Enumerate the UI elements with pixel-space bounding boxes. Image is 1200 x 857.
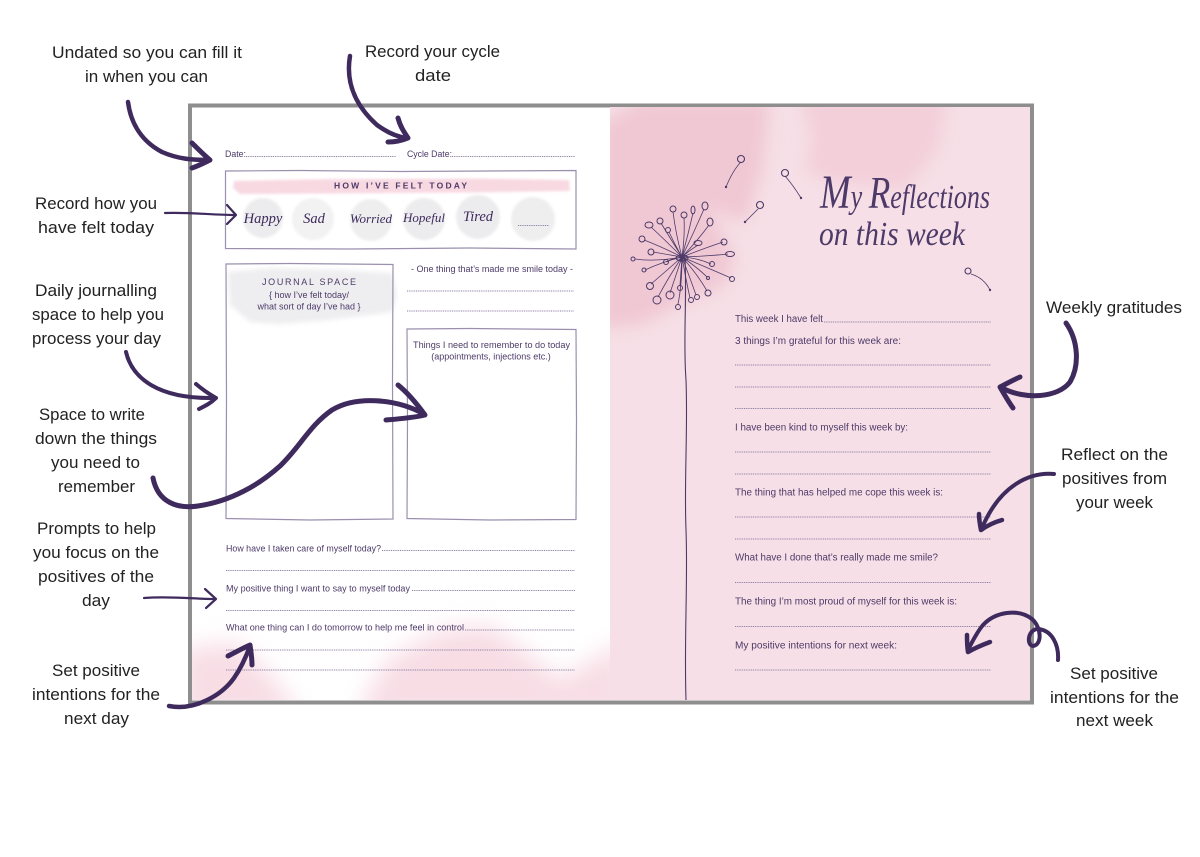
panel: journal space: what sort of day I’ve had }: [256, 302, 361, 312]
callout: next day intentions: next day: [64, 710, 130, 728]
callout: daily journalling: space to help you: [32, 306, 164, 324]
dandelion illustration: [631, 202, 734, 700]
arrow: to cycle date: [349, 56, 408, 142]
panel: left daily journal page: [180, 149, 625, 720]
panel: things to remember: (appointments, injections etc.): [431, 352, 551, 362]
panel: journal space: { how I’ve felt today/: [269, 290, 350, 300]
callout: undated: [52, 44, 242, 86]
floating seeds: [725, 156, 991, 291]
weekly prompts: The thing that has helped me cope this week is:: [735, 488, 943, 498]
smile prompt: - One thing that’s made me smile today -: [411, 264, 573, 274]
panel: how I've felt today: Sad: [303, 211, 326, 227]
title: My Reflections on this week: [819, 166, 990, 253]
weekly prompts: The thing I’m most proud of myself for this week is:: [735, 596, 957, 608]
callout: undated: Undated so you can fill it: [52, 44, 242, 62]
arrow: to feelings panel: [165, 205, 236, 224]
callout: weekly positives: your week: [1076, 494, 1154, 512]
weekly prompts: My positive intentions for next week:: [735, 640, 897, 652]
arrow: to gratitudes: [1000, 323, 1076, 408]
callout: how you have felt: [35, 195, 157, 237]
callout: things to remember: Space to write: [39, 406, 145, 424]
weekly prompts: I have been kind to myself this week by:: [735, 422, 908, 434]
daily prompts: How have I taken care of myself today?: [226, 544, 381, 554]
panel: things to remember: Things I need to remember to do today: [413, 340, 570, 350]
callout: next day intentions: Set positive: [52, 662, 140, 680]
callout: daily journalling: [32, 282, 164, 348]
callout: cycle date: Record your cycle: [365, 43, 500, 61]
watercolour wash: top of page: [600, 95, 948, 328]
callout: weekly gratitudes: Weekly gratitudes: [1046, 299, 1182, 317]
panel: how I've felt today: Hopeful: [402, 210, 445, 225]
arrow: to remember box: [153, 385, 425, 507]
date fields: [225, 149, 575, 159]
panel: journal spread frame: [190, 106, 1032, 702]
callout: things to remember: [35, 406, 157, 496]
callout: prompts: Prompts to help: [37, 520, 156, 538]
panel: how I've felt today: Worried: [350, 211, 393, 226]
weekly prompts: [735, 314, 991, 670]
callout: next week intentions: next week: [1076, 712, 1154, 730]
weekly prompts: What have I done that’s really made me smile?: [735, 552, 939, 564]
panel: right weekly reflections page: [600, 95, 991, 700]
weekly prompts: 3 things I’m grateful for this week are:: [735, 336, 901, 347]
arrow: looped to intentions: [967, 613, 1058, 660]
daily prompts: [226, 544, 575, 670]
panel: journal space: [226, 264, 397, 520]
callout: prompts: positives of the: [38, 568, 154, 586]
callout: prompts: you focus on the: [33, 544, 159, 562]
panel: how I've felt today: Happy: [243, 211, 283, 227]
callout: things to remember: you need to: [51, 454, 140, 472]
panel: how I've felt today: [226, 170, 576, 249]
arrow: to tomorrow prompt: [169, 645, 252, 707]
arrow: to journal space: [126, 352, 216, 409]
date fields: Cycle Date:: [407, 149, 452, 159]
callout: cycle date: date: [415, 67, 451, 85]
callout: weekly positives: positives from: [1062, 470, 1167, 488]
callout: next week intentions: Set positive: [1070, 665, 1158, 683]
arrow: to prompts: [144, 589, 216, 608]
watercolour wash: bottom left: [192, 618, 610, 700]
callout: weekly positives: [1061, 446, 1168, 512]
callout: things to remember: down the things: [35, 430, 157, 448]
daily prompts: What one thing can I do tomorrow to help me feel in control: [226, 622, 464, 632]
callout: daily journalling: process your day: [32, 330, 162, 348]
panel: how I've felt today: HOW I’VE FELT TODAY: [334, 180, 467, 190]
callout: next day intentions: [32, 662, 160, 728]
title: My Reflections on this week: My Reflections: [819, 166, 990, 219]
callout: weekly positives: Reflect on the: [1061, 446, 1168, 464]
arrow: undated to date field: [128, 102, 210, 168]
callout: next week intentions: intentions for the: [1050, 689, 1179, 707]
panel: things to remember: [407, 328, 576, 520]
callout: next day intentions: intentions for the: [32, 686, 160, 704]
weekly prompts: This week I have felt: [735, 314, 823, 325]
callout: prompts: day: [82, 592, 111, 610]
arrow: to coping prompt: [979, 474, 1054, 530]
callout: undated: in when you can: [85, 68, 208, 86]
callout: next week intentions: [1050, 665, 1179, 730]
callout: things to remember: remember: [58, 478, 136, 496]
date fields: Date:: [225, 149, 246, 159]
callout: cycle date: [365, 43, 500, 85]
callout: daily journalling: Daily journalling: [35, 282, 157, 300]
panel: journal space: JOURNAL SPACE: [262, 277, 356, 287]
panel: how I've felt today: Tired: [463, 209, 494, 225]
callout: how you have felt: Record how you: [35, 195, 157, 213]
daily prompts: My positive thing I want to say to myself today: [226, 584, 410, 594]
callout: how you have felt: have felt today: [38, 219, 155, 237]
callout: prompts: [33, 520, 159, 610]
title: My Reflections on this week: on this week: [819, 216, 966, 253]
